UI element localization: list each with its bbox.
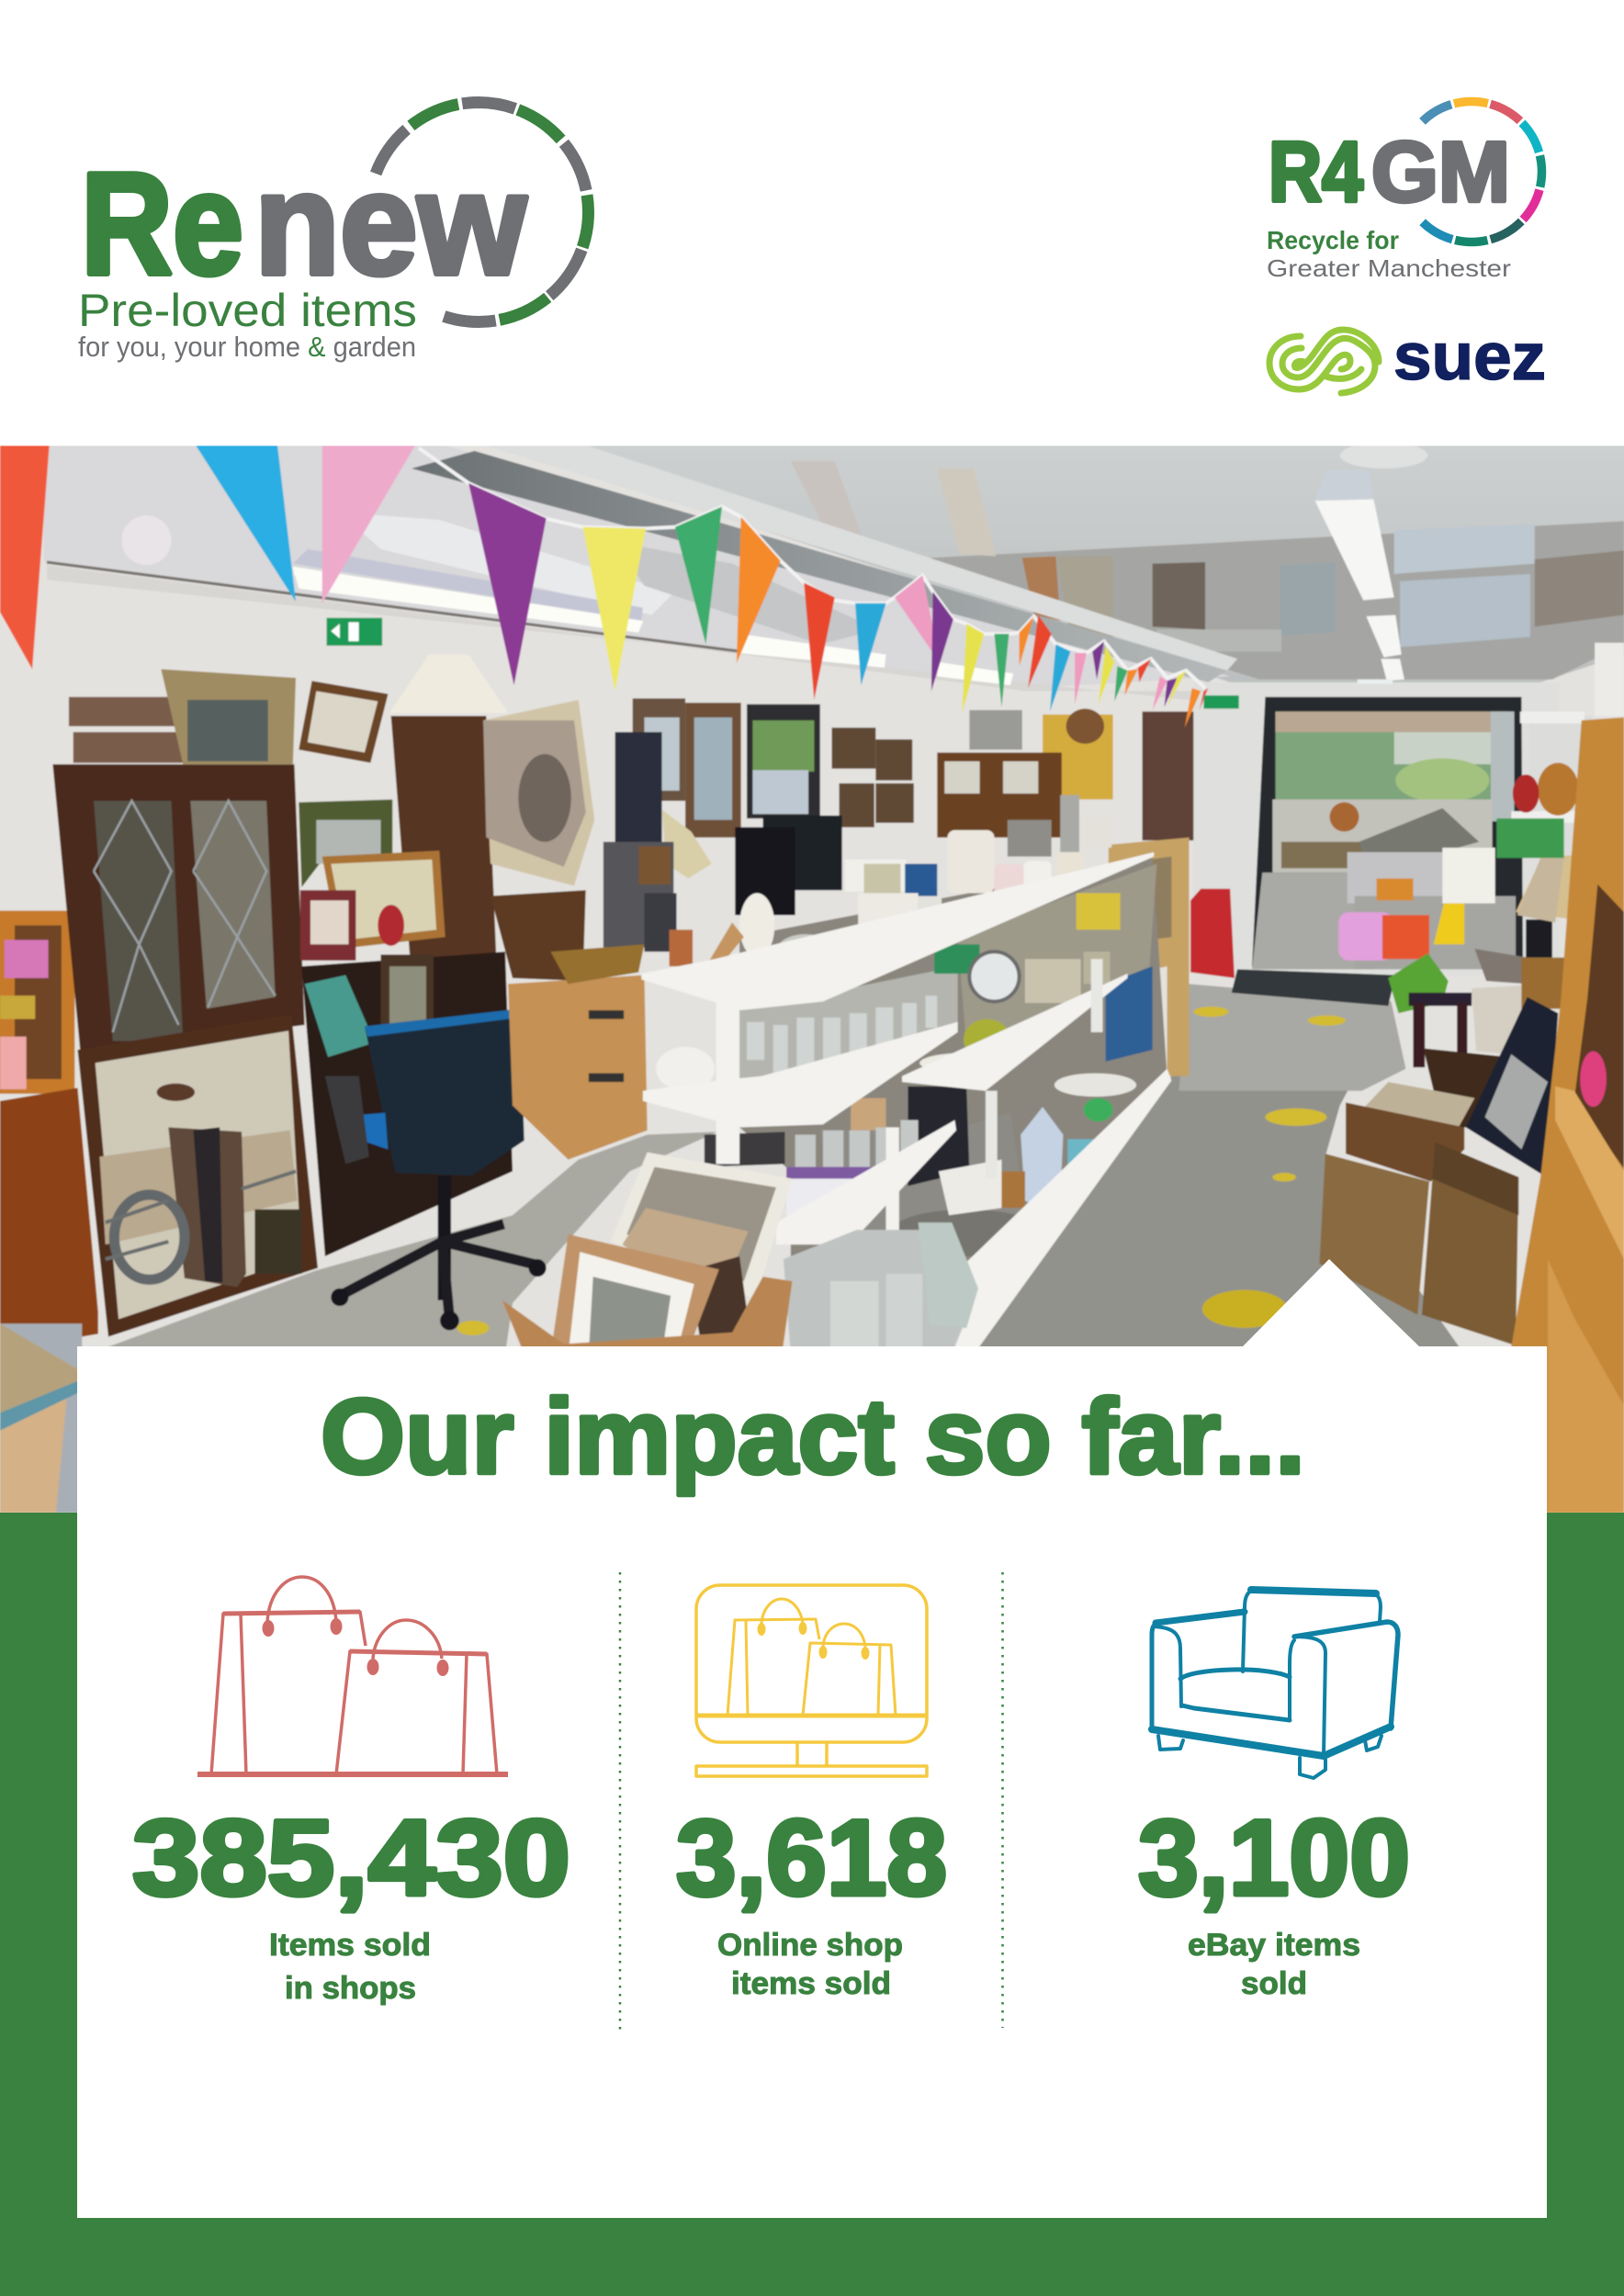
goods on middle shelves [656, 996, 1136, 1256]
Recycle for: Recycle for [1267, 226, 1399, 254]
wall pictures centre [633, 698, 914, 838]
small cabinet left [0, 911, 74, 1094]
R4GM ring [1402, 101, 1541, 242]
green painting [305, 975, 375, 1057]
white lamp and tall cabinet [389, 655, 507, 959]
bags and CD rack [603, 732, 712, 951]
wine rack [491, 890, 586, 981]
framed print [299, 681, 388, 763]
label [717, 1928, 903, 2001]
R4GM wordmark: R4 [1269, 124, 1363, 219]
extinguisher [1190, 889, 1235, 978]
number: 385,430 [132, 1797, 570, 1918]
white shelves [641, 852, 1171, 1355]
side room shelving [1496, 712, 1592, 922]
heading: Our impact so far... [321, 1377, 1305, 1496]
goods on top shelf [670, 795, 1121, 1003]
frames in basket [502, 1153, 792, 1355]
right silver ceiling [588, 446, 1624, 683]
gilded mirror [161, 670, 296, 764]
wicker baskets [1319, 1082, 1518, 1345]
monitors [735, 816, 842, 915]
SUEZ swirl icon [1269, 330, 1379, 393]
tall display cabinet [52, 764, 305, 1054]
stat column: eBay items sold [1138, 1590, 1410, 2001]
bunting string [419, 448, 1205, 688]
R4GM wordmark: GM [1371, 124, 1510, 219]
poster of faces [483, 700, 594, 886]
ceiling light strips [121, 442, 1427, 685]
label [1188, 1928, 1360, 2001]
label: eBay items [1188, 1928, 1360, 1963]
pictures behind desk [299, 799, 445, 961]
office chair [325, 1008, 547, 1330]
label: in shops [285, 1971, 416, 2006]
floor [88, 984, 1464, 1355]
floor stickers [457, 1007, 1346, 1335]
ceiling exit light [1358, 680, 1393, 684]
large figure painting [77, 1015, 318, 1337]
stat column: online shop items sold [676, 1585, 947, 2001]
number: 3,100 [1138, 1797, 1410, 1918]
wall [0, 439, 1624, 1523]
stat column: items sold in shops [132, 1577, 570, 2006]
R4GM wordmark [1269, 124, 1510, 219]
exit sign back [1203, 695, 1239, 709]
logo: SUEZ [1269, 321, 1546, 394]
label: sold [1241, 1966, 1307, 2001]
number: 3,618 [676, 1797, 947, 1918]
sideboard left [0, 1088, 98, 1340]
column dividers [620, 1572, 1003, 2030]
SUEZ wordmark: suez [1393, 321, 1546, 394]
label: Items sold [269, 1928, 431, 1963]
glass jars front [784, 1222, 978, 1355]
bunting flags [0, 439, 1208, 727]
icon: monitor with bags [696, 1585, 927, 1776]
tapestry and back wood shelves [937, 709, 1193, 1076]
wood poster and crate below [1106, 966, 1153, 1062]
strapline: for you, your home & garden [78, 331, 416, 363]
green footer band [0, 1513, 1624, 2296]
wooden table bottom left [0, 1323, 82, 1521]
wordmark [81, 143, 527, 305]
panel: impact white card with pointer [77, 1259, 1547, 2218]
small framed picture [380, 953, 434, 1025]
label [269, 1928, 431, 2006]
fire exit sign [327, 618, 382, 646]
logo ring [369, 103, 588, 321]
icon: armchair [1152, 1590, 1398, 1778]
back wall [1198, 681, 1539, 700]
doorway [1252, 697, 1523, 969]
left ceiling and soffit [44, 439, 1237, 703]
right wooden unit [1511, 643, 1624, 1517]
label: Online shop [717, 1928, 903, 1963]
logo: R4GM [1267, 101, 1541, 282]
icon: shopping bags [197, 1577, 508, 1774]
wordmark: Re [81, 143, 243, 305]
wordmark: new [254, 143, 527, 305]
lampshade [69, 697, 183, 763]
filing cabinet [508, 975, 648, 1160]
label: items sold [731, 1966, 891, 2001]
door mat [1232, 969, 1395, 1006]
shelving back [739, 858, 1167, 1262]
tagline: Pre-loved items [78, 285, 417, 336]
right room furniture [1388, 855, 1579, 1128]
logo: Renew [78, 103, 588, 363]
wire basket [550, 944, 644, 984]
dark desk area [301, 951, 513, 1256]
Greater Manchester: Greater Manchester [1267, 254, 1511, 282]
photo: shop interior [0, 439, 1624, 1523]
dark collage frame [1466, 997, 1558, 1177]
